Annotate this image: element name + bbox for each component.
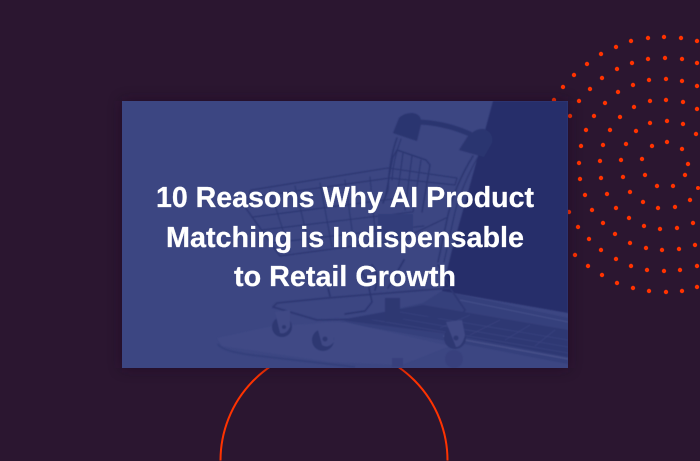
photo: laptop base [374, 299, 567, 362]
basket [245, 168, 457, 207]
photo: shopping cart [245, 113, 492, 320]
cart base rails [273, 288, 465, 320]
cart wheels [272, 298, 466, 368]
child seat [393, 150, 430, 212]
title [156, 182, 535, 293]
decorative dot circle [552, 35, 700, 294]
hero card [122, 101, 568, 368]
title: to Retail Growth [234, 261, 456, 293]
photo: keyboard [340, 300, 568, 359]
cart frame [383, 138, 397, 203]
title: 10 Reasons Why AI Product [156, 182, 535, 214]
title: Matching is Indispensable [166, 222, 524, 254]
photo: laptop screen [442, 101, 568, 313]
card shadow [122, 101, 568, 368]
cart handle [393, 113, 486, 156]
infographic canvas [122, 34, 700, 460]
photo: tablet surface [273, 333, 334, 346]
decorative outline circle [220, 347, 448, 460]
